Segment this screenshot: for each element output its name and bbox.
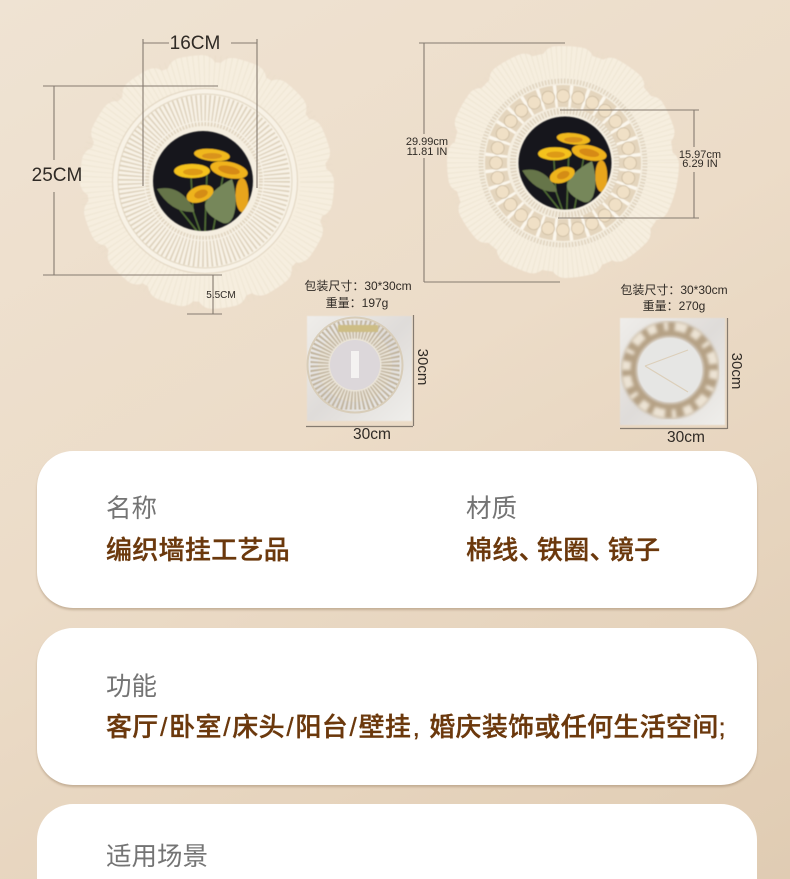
package dimension lines left: [306, 315, 414, 426]
product dimensions illustration: [32, 33, 745, 446]
mirror with sunflowers (right): [518, 116, 612, 210]
macrame mirror: round fringe: [87, 62, 327, 302]
heading: material: 材质: [466, 495, 517, 523]
dimension lines: left mirror: [43, 39, 257, 314]
value: function: 客厅/卧室/床头/阳台/壁挂, 婚庆装饰或任何生活空间;: [106, 712, 726, 742]
package info right: 重量：270g: [643, 299, 705, 313]
label: 30cm rotated left: 30cm: [414, 349, 431, 385]
label: 30cm rotated right: 30cm: [728, 353, 745, 389]
label: 30cm bottom left: 30cm: [353, 426, 391, 443]
value: name: 编织墙挂工艺品: [106, 535, 290, 565]
heading: usage scene: 适用场景: [106, 843, 208, 871]
package photo left: [307, 316, 412, 421]
label: 16CM: 16CM: [170, 33, 220, 54]
panel: name and material: [37, 451, 757, 608]
label: 15.97cm 6.29 IN: 6.29 IN: [682, 158, 718, 170]
package photo right: [620, 318, 725, 425]
heading: name: 名称: [106, 495, 157, 523]
label: 29.99cm 11.81 IN: 11.81 IN: [407, 146, 447, 158]
package info left: 包装尺寸：30*30cm: [304, 279, 412, 293]
label: 25CM: 25CM: [32, 165, 82, 186]
label: 30cm bottom right: 30cm: [667, 429, 705, 446]
mirror with sunflowers (left): [153, 131, 253, 231]
label: 15.97cm 6.29 IN: 15.97cm: [679, 149, 721, 161]
heading: function: 功能: [106, 673, 157, 701]
package info left: 重量：197g: [326, 296, 388, 310]
dimension lines: right mirror: [419, 43, 699, 282]
label: 5.5CM: 5.5CM: [206, 290, 236, 301]
package dimension lines right: [620, 318, 728, 429]
package info right: 包装尺寸：30*30cm: [620, 283, 728, 297]
value: material: 棉线、铁圈、镜子: [466, 535, 660, 565]
label: 29.99cm 11.81 IN: 29.99cm: [406, 136, 448, 148]
panel: function: [37, 628, 757, 785]
macrame mirror: beaded fringe: [442, 41, 684, 283]
panel: usage scene: [37, 804, 757, 879]
